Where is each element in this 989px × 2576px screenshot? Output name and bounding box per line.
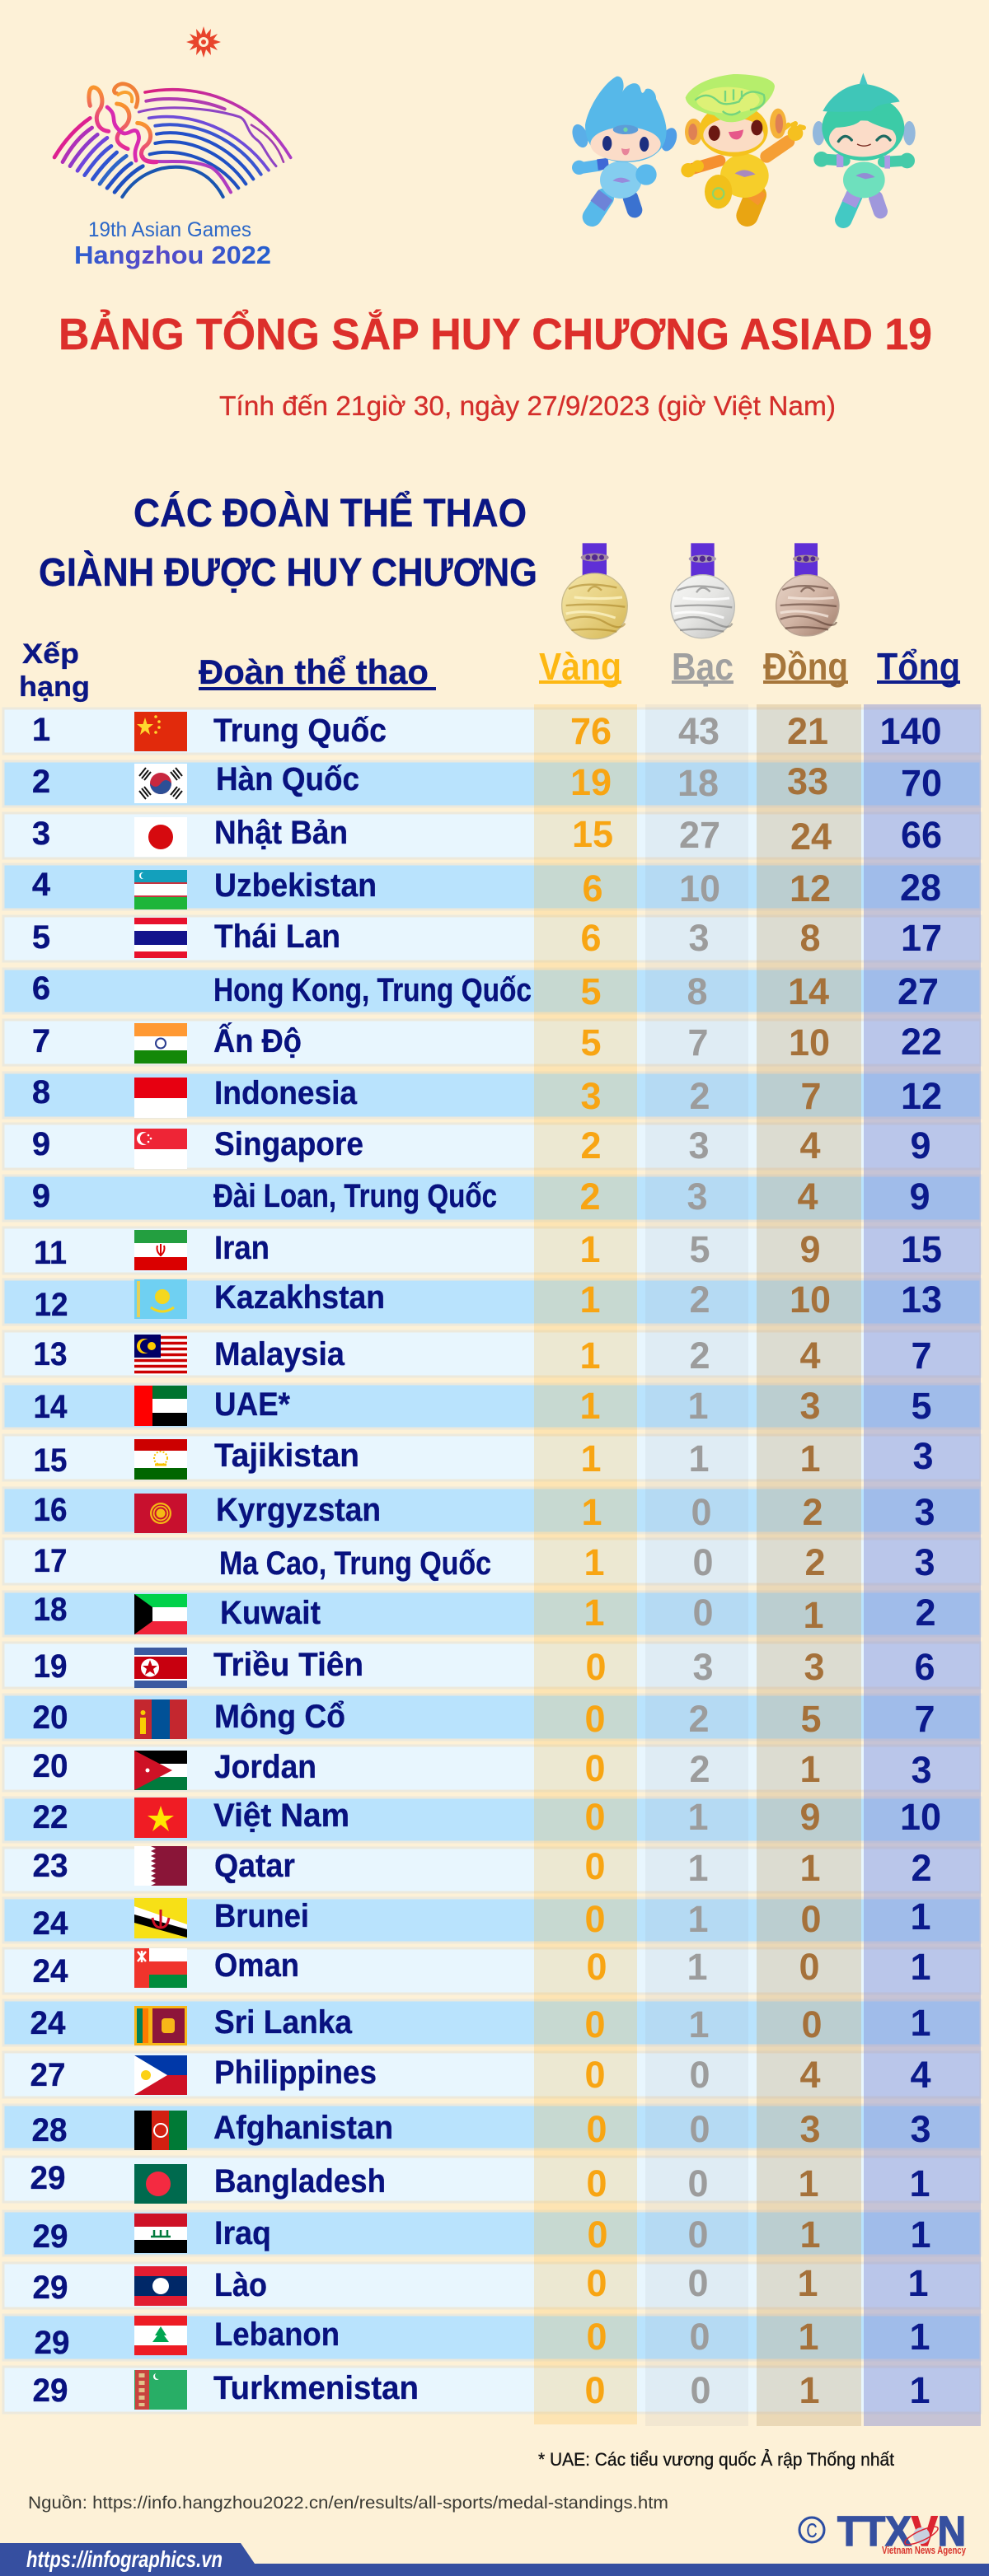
- row 5: Thái Lan: 3: [688, 917, 710, 959]
- row 19: Triều Tiên: 3: [804, 1646, 825, 1688]
- row 17: Ma Cao, Trung Quốc: 2: [804, 1541, 826, 1583]
- row 30: Iraq: [33, 2214, 931, 2256]
- row 3: Nhật Bản: 27: [679, 814, 720, 856]
- row 14: UAE: 5: [911, 1385, 932, 1427]
- copyright mark: C: [806, 2520, 818, 2542]
- row 33: Turkmenistan: 0: [584, 2369, 606, 2411]
- logo: TTXVN: [799, 2508, 967, 2556]
- row 29: Bangladesh: 29: [30, 2160, 66, 2196]
- logo text: Hangzhou 2022: Hangzhou 2022: [74, 241, 271, 269]
- row 28: Afghanistan: 0: [689, 2108, 710, 2150]
- row 27: Philippines: 0: [689, 2054, 710, 2096]
- row 12: Kazakhstan: 1: [579, 1279, 601, 1321]
- row 4: Uzbekistan: 6: [582, 867, 603, 909]
- row 7: Ấn Độ: 10: [789, 1022, 830, 1064]
- row 10: Đài Loan, Trung Quốc: Đài Loan, Trung Quốc: [213, 1178, 497, 1214]
- row 21: Jordan: 20: [33, 1748, 68, 1784]
- row 14: UAE: 14: [33, 1389, 68, 1425]
- row 8: Indonesia: 7: [800, 1075, 822, 1117]
- flag: South Korea: [134, 764, 187, 803]
- row 7: Ấn Độ: 22: [901, 1021, 942, 1063]
- row 16: Kyrgyzstan: Kyrgyzstan: [216, 1492, 381, 1528]
- row 25: Oman: 0: [586, 1946, 607, 1988]
- flag: Indonesia: [134, 1078, 187, 1118]
- row 19: Triều Tiên: 0: [585, 1646, 607, 1688]
- logo mark: [54, 84, 291, 197]
- row 18: Kuwait: 2: [915, 1592, 936, 1634]
- row 20: Mông Cổ: Mông Cổ: [214, 1699, 345, 1735]
- row 5: Thái Lan: 5: [32, 919, 50, 956]
- row 21: Jordan: 2: [689, 1748, 710, 1790]
- row 28: Afghanistan: [31, 2108, 931, 2150]
- row 8: Indonesia: 12: [901, 1075, 942, 1117]
- row 27: Philippines: Philippines: [214, 2055, 377, 2091]
- row 14: UAE: 1: [687, 1385, 709, 1427]
- row 27: Philippines: 4: [910, 2054, 931, 2096]
- flag: India: [134, 1023, 187, 1064]
- table header: silver: Bạc: [672, 645, 734, 688]
- row 4: Uzbekistan: [32, 867, 941, 909]
- row 5: Thái Lan: 6: [580, 917, 602, 959]
- row 9: Singapore: 3: [688, 1124, 710, 1166]
- row 4: Uzbekistan: 12: [790, 867, 831, 909]
- table header: delegation: Đoàn thể thao: [199, 652, 429, 691]
- flag: Uzbekistan: [134, 870, 187, 909]
- row 8: Indonesia: [32, 1074, 942, 1118]
- row 32: Lebanon: 1: [798, 2316, 819, 2358]
- row 26: Sri Lanka: 0: [584, 2003, 606, 2045]
- row 11: Iran: 15: [901, 1228, 942, 1270]
- row 18: Kuwait: Kuwait: [220, 1595, 321, 1631]
- row 28: Afghanistan: 3: [799, 2108, 821, 2150]
- row 1: Trung Quốc: 140: [879, 710, 942, 752]
- row 4: Uzbekistan: Uzbekistan: [214, 867, 377, 904]
- row 6: Hong Kong, Trung Quốc: Hong Kong, Trung Quốc: [213, 972, 532, 1008]
- row 7: Ấn Độ: 7: [687, 1022, 709, 1064]
- row 6: Hong Kong, Trung Quốc: 8: [687, 970, 708, 1012]
- row 3: Nhật Bản: 15: [572, 813, 613, 855]
- row 24: Brunei: 0: [800, 1898, 822, 1940]
- row 10: Đài Loan, Trung Quốc: 9: [909, 1176, 930, 1218]
- row 14: UAE: [33, 1385, 932, 1427]
- flag: Turkmenistan: [134, 2370, 187, 2410]
- row 20: Mông Cổ: 0: [584, 1698, 606, 1740]
- row 27: Philippines: 0: [584, 2054, 606, 2096]
- row 1: Trung Quốc: 43: [678, 710, 719, 752]
- row 2: Hàn Quốc: 2: [32, 764, 50, 800]
- row 11: Iran: Iran: [214, 1230, 270, 1266]
- row 30: Iraq: 0: [687, 2214, 709, 2256]
- table header: rank: hạng: [19, 671, 90, 703]
- row 27: Philippines: 27: [30, 2057, 66, 2093]
- row 9: Singapore: 4: [799, 1124, 821, 1166]
- row 28: Afghanistan: Afghanistan: [213, 2110, 393, 2146]
- heading: participating delegations: [39, 491, 537, 595]
- icon: bronze medal: [776, 543, 839, 636]
- row 12: Kazakhstan: 13: [901, 1279, 942, 1321]
- flag: Oman: [134, 1948, 187, 1988]
- flag: Tajikistan: [134, 1439, 187, 1480]
- row 16: Kyrgyzstan: 0: [691, 1491, 712, 1533]
- row 2: Hàn Quốc: Hàn Quốc: [216, 761, 359, 797]
- flag: Thailand: [134, 918, 187, 958]
- mascot: blue Lianlian: [569, 77, 680, 217]
- row 13: Malaysia: 4: [799, 1335, 821, 1377]
- row 14: UAE: UAE*: [214, 1386, 290, 1423]
- row 6: Hong Kong, Trung Quốc: 14: [788, 970, 829, 1012]
- row 12: Kazakhstan: 2: [689, 1279, 710, 1321]
- row 30: Iraq: 0: [587, 2214, 608, 2256]
- flag: China: [134, 712, 187, 751]
- row 29: Bangladesh: Bangladesh: [214, 2163, 386, 2200]
- row 20: Mông Cổ: 20: [33, 1699, 68, 1736]
- row 6: Hong Kong, Trung Quốc: 27: [898, 970, 939, 1012]
- mascot: yellow Congcong: [681, 74, 804, 216]
- row 12: Kazakhstan: Kazakhstan: [214, 1279, 385, 1316]
- row 25: Oman: 1: [910, 1946, 931, 1988]
- row 15: Tajikistan: 15: [33, 1442, 68, 1479]
- row 31: Lào: 1: [797, 2262, 818, 2304]
- row 8: Indonesia: 3: [580, 1075, 602, 1117]
- table row backgrounds: [3, 708, 981, 2413]
- row 1: Trung Quốc: Trung Quốc: [213, 713, 387, 749]
- row 30: Iraq: 1: [910, 2214, 931, 2256]
- row 25: Oman: [33, 1946, 931, 1989]
- medal column bands: [534, 704, 981, 2426]
- row 21: Jordan: [33, 1747, 932, 1791]
- row 31: Lào: [33, 2262, 929, 2306]
- row 20: Mông Cổ: 2: [688, 1698, 710, 1740]
- row 9: Singapore: 2: [580, 1124, 602, 1166]
- row 17: Ma Cao, Trung Quốc: Ma Cao, Trung Quốc: [219, 1545, 491, 1582]
- table header: bronze: Đồng: [763, 645, 848, 688]
- flag: UAE: [134, 1386, 187, 1426]
- row 24: Brunei: Brunei: [214, 1898, 309, 1934]
- row 15: Tajikistan: 1: [799, 1438, 821, 1480]
- row 28: Afghanistan: 28: [31, 2112, 68, 2148]
- icon: Asian Games sun emblem: [186, 26, 221, 58]
- row 20: Mông Cổ: 5: [800, 1698, 822, 1740]
- row 27: Philippines: 4: [799, 2054, 821, 2096]
- row 11: Iran: 1: [579, 1228, 601, 1270]
- row 26: Sri Lanka: 1: [688, 2003, 710, 2045]
- logo: Hangzhou 2022: [54, 84, 291, 269]
- row 26: Sri Lanka: 1: [910, 2002, 931, 2044]
- row 19: Triều Tiên: [33, 1646, 935, 1688]
- row 9: Singapore: 9: [910, 1124, 931, 1166]
- row 29: Bangladesh: 0: [687, 2162, 709, 2204]
- row 22: Việt Nam: 22: [33, 1799, 68, 1835]
- flag: Sri Lanka: [134, 2006, 187, 2045]
- row 22: Việt Nam: 10: [900, 1796, 941, 1838]
- row 4: Uzbekistan: 28: [900, 867, 941, 909]
- row 3: Nhật Bản: 3: [32, 816, 50, 852]
- row 20: Mông Cổ: 7: [914, 1698, 935, 1740]
- title: BẢNG TỔNG SẮP HUY CHƯƠNG ASIAD 19: [59, 309, 932, 359]
- flag: Laos: [134, 2266, 187, 2306]
- row 19: Triều Tiên: 3: [692, 1646, 714, 1688]
- row 18: Kuwait: 1: [584, 1592, 605, 1634]
- row 2: Hàn Quốc: 70: [901, 762, 942, 804]
- row 9: Singapore: 9: [32, 1126, 50, 1162]
- row 10: Đài Loan, Trung Quốc: [32, 1176, 930, 1218]
- row 10: Đài Loan, Trung Quốc: 3: [687, 1176, 708, 1218]
- heading: participating delegations: GIÀNH ĐƯỢC HUY CHƯƠNG: [39, 550, 537, 595]
- row 2: Hàn Quốc: 33: [787, 760, 828, 802]
- row 25: Oman: 24: [33, 1953, 68, 1989]
- flag: Singapore: [134, 1129, 187, 1169]
- row 23: Qatar: 0: [584, 1845, 606, 1887]
- row 7: Ấn Độ: 5: [580, 1022, 602, 1064]
- row 31: Lào: 0: [586, 2262, 607, 2304]
- row 33: Turkmenistan: 29: [33, 2373, 68, 2409]
- row 33: Turkmenistan: 0: [690, 2369, 711, 2411]
- row 9: Singapore: Singapore: [214, 1126, 363, 1162]
- row 24: Brunei: 24: [33, 1905, 68, 1942]
- row 33: Turkmenistan: Turkmenistan: [213, 2370, 419, 2406]
- row 26: Sri Lanka: 24: [30, 2005, 66, 2041]
- row 6: Hong Kong, Trung Quốc: 6: [32, 970, 50, 1007]
- row 6: Hong Kong, Trung Quốc: [32, 970, 939, 1012]
- row 14: UAE: 1: [579, 1385, 601, 1427]
- flag: Jordan: [134, 1751, 187, 1790]
- row 9: Singapore: [32, 1124, 931, 1169]
- row 13: Malaysia: [33, 1335, 932, 1377]
- row 17: Ma Cao, Trung Quốc: 1: [584, 1541, 605, 1583]
- row 13: Malaysia: 1: [579, 1335, 601, 1377]
- row 13: Malaysia: 13: [33, 1336, 68, 1372]
- flag: Qatar: [134, 1846, 187, 1886]
- row 17: Ma Cao, Trung Quốc: 0: [692, 1541, 714, 1583]
- row 14: UAE: 3: [799, 1385, 821, 1427]
- flag: Iraq: [134, 2214, 187, 2253]
- flag: Bangladesh: [134, 2164, 187, 2204]
- row 18: Kuwait: 0: [692, 1592, 714, 1634]
- flag: Japan: [134, 817, 187, 857]
- row 12: Kazakhstan: 12: [35, 1287, 68, 1323]
- row 23: Qatar: 1: [799, 1847, 821, 1889]
- row 25: Oman: 1: [687, 1946, 708, 1988]
- row 16: Kyrgyzstan: [33, 1491, 935, 1533]
- row 32: Lebanon: 1: [909, 2316, 930, 2358]
- row 7: Ấn Độ: [32, 1021, 942, 1064]
- row 32: Lebanon: Lebanon: [214, 2317, 340, 2353]
- row 25: Oman: 0: [799, 1946, 820, 1988]
- row 20: Mông Cổ: [33, 1698, 935, 1740]
- row 29: Bangladesh: 1: [798, 2162, 819, 2204]
- row 26: Sri Lanka: [30, 2002, 931, 2045]
- row 18: Kuwait: 18: [33, 1592, 68, 1628]
- row 29: Bangladesh: 1: [909, 2162, 930, 2204]
- row 26: Sri Lanka: 0: [801, 2003, 823, 2045]
- row 22: Việt Nam: [33, 1796, 941, 1838]
- row 31: Lào: 1: [907, 2262, 929, 2304]
- flag: Iran: [134, 1230, 187, 1270]
- row 8: Indonesia: 2: [689, 1075, 710, 1117]
- heading: participating delegations: CÁC ĐOÀN THỂ THAO: [134, 491, 527, 535]
- row 30: Iraq: 1: [799, 2214, 821, 2256]
- row 18: Kuwait: [33, 1592, 936, 1636]
- row 13: Malaysia: 7: [911, 1335, 932, 1377]
- row 23: Qatar: 2: [911, 1847, 932, 1889]
- row 11: Iran: 11: [34, 1235, 67, 1271]
- row 28: Afghanistan: 0: [586, 2108, 607, 2150]
- flag: Vietnam: [134, 1798, 187, 1838]
- wordmark: TTXVN: [837, 2508, 966, 2555]
- row 31: Lào: 0: [687, 2262, 709, 2304]
- row 5: Thái Lan: [32, 917, 942, 959]
- row 2: Hàn Quốc: 18: [677, 762, 719, 804]
- row 30: Iraq: Iraq: [214, 2215, 271, 2251]
- row 2: Hàn Quốc: 19: [570, 761, 612, 803]
- row 7: Ấn Độ: Ấn Độ: [213, 1022, 302, 1059]
- row 5: Thái Lan: 17: [901, 917, 942, 959]
- row 5: Thái Lan: Thái Lan: [214, 919, 340, 955]
- row 12: Kazakhstan: 10: [790, 1279, 831, 1321]
- row 13: Malaysia: 2: [689, 1335, 710, 1377]
- logo text: 19th Asian Games: 19th Asian Games: [88, 218, 251, 241]
- row 28: Afghanistan: 3: [910, 2108, 931, 2150]
- row 16: Kyrgyzstan: 16: [33, 1492, 68, 1528]
- row 27: Philippines: [30, 2054, 931, 2096]
- row 24: Brunei: 1: [910, 1896, 931, 1938]
- row 22: Việt Nam: 0: [584, 1796, 606, 1838]
- row 29: Bangladesh: 0: [586, 2162, 607, 2204]
- row 1: Trung Quốc: 76: [570, 710, 612, 752]
- footer bar: [0, 2543, 989, 2576]
- row 16: Kyrgyzstan: 3: [914, 1491, 935, 1533]
- copyright mark: [799, 2518, 824, 2542]
- row 21: Jordan: 0: [584, 1747, 606, 1789]
- globe: [903, 2523, 940, 2548]
- mascots: [569, 72, 916, 220]
- row 31: Lào: Lào: [214, 2267, 267, 2303]
- row 11: Iran: [34, 1228, 942, 1271]
- row 3: Nhật Bản: [32, 813, 942, 858]
- flag: Afghanistan: [134, 2111, 187, 2150]
- row 29: Bangladesh: [30, 2160, 930, 2204]
- row 15: Tajikistan: 1: [688, 1438, 710, 1480]
- row 32: Lebanon: [35, 2316, 930, 2361]
- row 23: Qatar: Qatar: [214, 1848, 295, 1884]
- row 22: Việt Nam: Việt Nam: [213, 1798, 349, 1834]
- flag: Kazakhstan: [134, 1279, 187, 1319]
- flag: Brunei: [134, 1898, 187, 1938]
- table header: rank: Xếp: [22, 638, 79, 670]
- table header: total: Tổng: [877, 645, 960, 688]
- row 4: Uzbekistan: 10: [679, 867, 720, 909]
- row 23: Qatar: 23: [33, 1848, 68, 1884]
- row 6: Hong Kong, Trung Quốc: 5: [580, 970, 602, 1012]
- row 21: Jordan: 1: [799, 1748, 821, 1790]
- footnote: UAE: * UAE: Các tiểu vương quốc Ả rập Thống nhất: [538, 2449, 894, 2470]
- flag: North Korea: [134, 1648, 187, 1688]
- flag: Kuwait: [134, 1594, 187, 1634]
- row 17: Ma Cao, Trung Quốc: 17: [33, 1543, 68, 1579]
- row 33: Turkmenistan: [33, 2369, 930, 2411]
- row 11: Iran: 5: [689, 1228, 710, 1270]
- row 3: Nhật Bản: 24: [790, 816, 832, 858]
- source: Nguồn: https://info.hangzhou2022.cn/en/results/all-sports/medal-standings.htm: [28, 2494, 668, 2513]
- website url: https://infographics.vn: [26, 2546, 223, 2572]
- flag: Philippines: [134, 2055, 187, 2095]
- row 8: Indonesia: 8: [32, 1074, 50, 1110]
- row 32: Lebanon: 0: [689, 2316, 710, 2358]
- row 25: Oman: Oman: [214, 1947, 299, 1984]
- row 12: Kazakhstan: [35, 1279, 942, 1323]
- row 26: Sri Lanka: Sri Lanka: [214, 2004, 353, 2041]
- row 10: Đài Loan, Trung Quốc: 2: [579, 1176, 601, 1218]
- icon: gold medal: [562, 543, 627, 639]
- row 19: Triều Tiên: Triều Tiên: [213, 1647, 363, 1683]
- flag: Mongolia: [134, 1699, 187, 1739]
- row 1: Trung Quốc: 1: [32, 712, 50, 748]
- row 23: Qatar: 1: [687, 1847, 709, 1889]
- row 18: Kuwait: 1: [803, 1594, 824, 1636]
- row 24: Brunei: 0: [584, 1898, 606, 1940]
- row 33: Turkmenistan: 1: [909, 2369, 930, 2411]
- table header: gold: Vàng: [539, 645, 621, 688]
- mascot: green Chenchen: [813, 72, 916, 220]
- flag: Lebanon: [134, 2316, 187, 2355]
- row 32: Lebanon: 29: [35, 2325, 69, 2361]
- row 3: Nhật Bản: Nhật Bản: [214, 815, 348, 851]
- row 30: Iraq: 29: [33, 2218, 68, 2255]
- row 11: Iran: 9: [799, 1228, 821, 1270]
- row 15: Tajikistan: [33, 1435, 934, 1480]
- row 17: Ma Cao, Trung Quốc: [33, 1541, 935, 1583]
- row 2: Hàn Quốc: [32, 760, 942, 804]
- icon: silver medal: [671, 543, 734, 638]
- row 24: Brunei: [33, 1896, 931, 1942]
- row 22: Việt Nam: 1: [687, 1796, 709, 1838]
- row 24: Brunei: 1: [687, 1898, 709, 1940]
- row 32: Lebanon: 0: [586, 2316, 607, 2358]
- row 21: Jordan: 3: [911, 1749, 932, 1791]
- row 13: Malaysia: Malaysia: [214, 1336, 345, 1372]
- row 21: Jordan: Jordan: [214, 1749, 316, 1785]
- row 10: Đài Loan, Trung Quốc: 4: [797, 1176, 818, 1218]
- row 22: Việt Nam: 9: [799, 1796, 821, 1838]
- row 15: Tajikistan: 1: [580, 1438, 602, 1480]
- subtitle: Tính đến 21giờ 30, ngày 27/9/2023 (giờ Việt Nam): [219, 390, 836, 421]
- row 15: Tajikistan: Tajikistan: [214, 1438, 359, 1474]
- medals: [562, 543, 839, 639]
- row 1: Trung Quốc: [32, 710, 942, 752]
- row 15: Tajikistan: 3: [912, 1435, 934, 1477]
- row 16: Kyrgyzstan: 1: [581, 1491, 602, 1533]
- row 19: Triều Tiên: 6: [914, 1646, 935, 1688]
- row 8: Indonesia: Indonesia: [214, 1075, 358, 1111]
- row 10: Đài Loan, Trung Quốc: 9: [32, 1178, 50, 1214]
- row 3: Nhật Bản: 66: [901, 814, 942, 856]
- flag: Kyrgyzstan: [134, 1494, 187, 1533]
- row 4: Uzbekistan: 4: [32, 867, 51, 903]
- flag: Malaysia: [134, 1335, 187, 1375]
- row 19: Triều Tiên: 19: [33, 1648, 68, 1685]
- row 1: Trung Quốc: 21: [787, 710, 828, 752]
- row 33: Turkmenistan: 1: [799, 2369, 820, 2411]
- row 17: Ma Cao, Trung Quốc: 3: [914, 1541, 935, 1583]
- row 31: Lào: 29: [33, 2270, 68, 2306]
- row 7: Ấn Độ: 7: [32, 1023, 50, 1059]
- row 5: Thái Lan: 8: [799, 917, 821, 959]
- row 23: Qatar: [33, 1845, 932, 1889]
- row 16: Kyrgyzstan: 2: [802, 1491, 823, 1533]
- table header: rank: [19, 638, 90, 703]
